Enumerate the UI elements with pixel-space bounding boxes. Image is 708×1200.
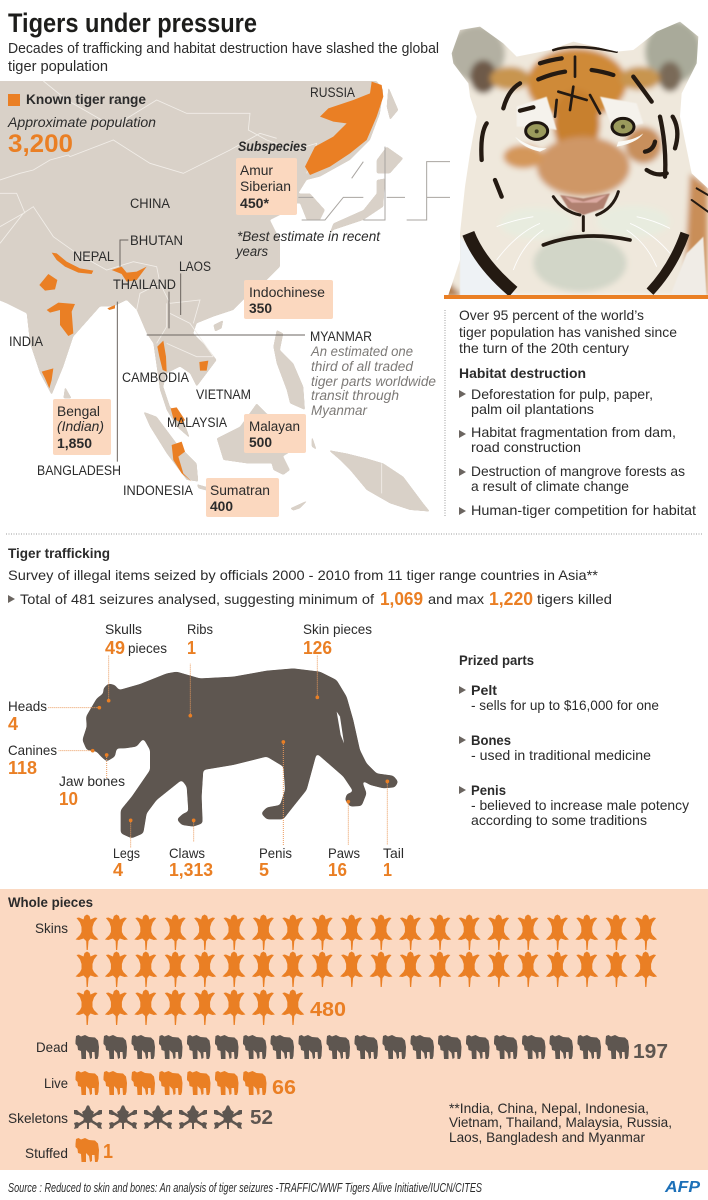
tiger photo (440, 20, 708, 297)
stuffed pictogram (76, 1138, 99, 1162)
seizures sentence: tigers killed (537, 591, 612, 607)
box: Sumatran (206, 478, 279, 517)
body part labels: Tail (383, 845, 404, 861)
body part labels: Legs (113, 845, 140, 861)
body part labels (8, 621, 404, 880)
box: Malayan: 500 (249, 435, 272, 450)
body part labels: 4 (113, 860, 123, 880)
Myanmar callout: Myanmar (311, 403, 367, 418)
best estimate note: years (235, 244, 268, 259)
body part labels: Claws (169, 845, 205, 861)
box: Amur Siberian: Siberian (240, 179, 291, 194)
box: Indochinese: Indochinese (249, 285, 325, 300)
seizures sentence (8, 589, 612, 609)
country labels: MALAYSIA (167, 415, 227, 430)
box: Amur Siberian: 450* (240, 196, 270, 211)
row labels: Skins (35, 920, 68, 936)
approximate population (7, 114, 156, 158)
approximate population: Approximate population (7, 114, 156, 130)
country labels: CHINA (130, 196, 170, 211)
tiger silhouette with labels (8, 621, 404, 880)
body part labels: Ribs (187, 621, 213, 637)
country labels: LAOS (179, 259, 211, 274)
soft colour layers (440, 20, 708, 297)
body part labels: 49 (105, 638, 125, 658)
country labels: THAILAND (113, 277, 176, 292)
intro text: the turn of the 20th century (459, 340, 629, 356)
body part labels: Paws (328, 845, 360, 861)
body part labels: Heads (8, 698, 47, 714)
box: Bengal: Bengal (57, 404, 100, 419)
prized parts: - sells for up to $16,000 for one (471, 697, 659, 713)
country footnote: Laos, Bangladesh and Myanmar (449, 1129, 645, 1145)
country labels: VIETNAM (196, 387, 251, 402)
country labels: NEPAL (73, 249, 114, 264)
prized parts: Penis (471, 782, 506, 798)
subspecies heading: Subspecies (238, 138, 307, 154)
watermark lines (298, 147, 450, 220)
body part labels: Canines (8, 742, 57, 758)
body part labels: 5 (259, 860, 269, 880)
box: Sumatran: 400 (210, 499, 233, 514)
country labels: BANGLADESH (37, 463, 121, 478)
land masses (0, 81, 430, 512)
country labels: INDIA (9, 334, 43, 349)
box: Malayan (244, 414, 306, 453)
body part labels: 1 (187, 638, 196, 658)
legend: known tiger range: Known tiger range (26, 91, 146, 107)
seizures sentence: Total of 481 seizures analysed, suggesting minimum of (20, 591, 374, 607)
body part labels: 4 (8, 714, 18, 734)
box: Amur Siberian: Amur (240, 163, 274, 178)
body part labels: 118 (8, 758, 37, 778)
subtitle: tiger population (8, 58, 108, 75)
country labels: BHUTAN (130, 233, 183, 248)
seizures sentence: and max (428, 591, 484, 607)
country footnote: Vietnam, Thailand, Malaysia, Russia, (449, 1114, 672, 1130)
prized parts: - believed to increase male potency (471, 797, 689, 813)
source line: Source : Reduced to skin and bones: An analysis of tiger seizures -TRAFFIC/WWF Tigers Alive Initiative/IUCN/CITES (8, 1181, 482, 1195)
habitat destruction list: a result of climate change (471, 478, 629, 494)
body part labels: 1 (383, 860, 392, 880)
body part labels: Skin pieces (303, 621, 372, 637)
habitat destruction list: palm oil plantations (471, 401, 594, 417)
habitat destruction list: Destruction of mangrove forests as (471, 463, 685, 479)
habitat destruction list: Human-tiger competition for habitat (471, 502, 696, 518)
prized parts (459, 652, 689, 828)
row labels: Live (44, 1075, 68, 1091)
dead total: 197 (633, 1041, 668, 1063)
country labels: RUSSIA (310, 85, 355, 100)
Myanmar callout: tiger parts worldwide (311, 374, 436, 389)
body part labels: Skulls (105, 621, 142, 637)
habitat destruction list: Habitat destruction (459, 365, 586, 381)
box: Indochinese (244, 280, 333, 319)
body part labels: 16 (328, 860, 347, 880)
dead pictogram (76, 1035, 629, 1059)
box: Amur Siberian (236, 158, 297, 215)
body part labels: Penis (259, 845, 292, 861)
Myanmar callout (310, 329, 436, 418)
orange bar under photo (444, 295, 708, 299)
subtitle: Decades of trafficking and habitat destruction have slashed the global (8, 40, 439, 57)
seizures sentence: 1,220 (489, 589, 533, 609)
subtitle (8, 40, 439, 75)
Myanmar callout: third of all traded (311, 359, 413, 374)
habitat destruction list: Deforestation for pulp, paper, (471, 386, 653, 402)
dotted column divider (444, 310, 446, 516)
silhouette (48, 655, 398, 848)
map of tiger range (0, 81, 450, 512)
row labels: Dead (36, 1039, 68, 1055)
box: Bengal: 1,850 (57, 436, 92, 451)
stuffed total: 1 (103, 1141, 113, 1163)
row labels (8, 920, 68, 1161)
survey sentence: Survey of illegal items seized by officials 2000 - 2010 from 11 tiger range countries in Asia** (8, 567, 599, 583)
watermark on photo (440, 146, 463, 197)
habitat destruction list (459, 365, 696, 518)
panel: whole pieces (0, 889, 708, 1170)
country footnote: **India, China, Nepal, Indonesia, (449, 1100, 649, 1116)
seizures sentence: 1,069 (380, 589, 423, 609)
prized parts: Pelt (471, 682, 497, 698)
prized parts: Bones (471, 732, 511, 748)
prized parts: according to some traditions (471, 812, 647, 828)
habitat destruction list: road construction (471, 439, 581, 455)
live total: 66 (272, 1077, 296, 1099)
country borders (0, 81, 382, 493)
approximate population: 3,200 (8, 130, 73, 158)
box: Bengal (53, 399, 111, 455)
live pictogram (76, 1071, 266, 1095)
Myanmar callout: transit through (311, 388, 399, 403)
row labels: Stuffed (25, 1145, 68, 1161)
skeletons total: 52 (250, 1107, 273, 1129)
country footnote (449, 1100, 672, 1145)
prized parts: Prized parts (459, 652, 534, 668)
body part labels: 126 (303, 638, 332, 658)
skins total: 480 (310, 999, 346, 1021)
body part labels: pieces (128, 640, 167, 656)
body part labels: 10 (59, 789, 78, 809)
fine fur patches (460, 97, 707, 297)
leader lines (48, 655, 387, 848)
country labels (9, 85, 355, 498)
Myanmar callout: MYANMAR (310, 329, 372, 344)
trafficking section heading: Tiger trafficking (8, 545, 110, 561)
body part labels: Jaw bones (59, 773, 125, 789)
prized parts: - used in traditional medicine (471, 747, 651, 763)
country labels: CAMBODIA (122, 370, 189, 385)
intro text (459, 307, 677, 356)
best estimate note (235, 229, 381, 259)
box: Bengal: (Indian) (57, 419, 104, 434)
box: Indochinese: 350 (249, 301, 272, 316)
whiskers (497, 217, 670, 270)
stripes (468, 47, 708, 292)
skeletons pictogram (74, 1106, 242, 1129)
tiger range patches (39, 82, 383, 482)
habitat destruction list: Habitat fragmentation from dam, (471, 424, 676, 440)
AFP logo: AFP (664, 1179, 700, 1196)
best estimate note: *Best estimate in recent (237, 229, 381, 244)
row labels: Skeletons (8, 1110, 68, 1126)
whole pieces heading: Whole pieces (8, 894, 93, 910)
title: Tigers under pressure (8, 8, 257, 38)
Myanmar callout: An estimated one (310, 344, 413, 359)
intro text: Over 95 percent of the world’s (459, 307, 644, 323)
skins pictogram (76, 914, 657, 1025)
box: Malayan: Malayan (249, 419, 300, 434)
box: Sumatran: Sumatran (210, 483, 270, 498)
body part labels: 1,313 (169, 860, 213, 880)
eyes (515, 118, 643, 152)
country labels: INDONESIA (123, 483, 193, 498)
intro text: tiger population has vanished since (459, 324, 677, 340)
map callout lines (117, 240, 305, 462)
